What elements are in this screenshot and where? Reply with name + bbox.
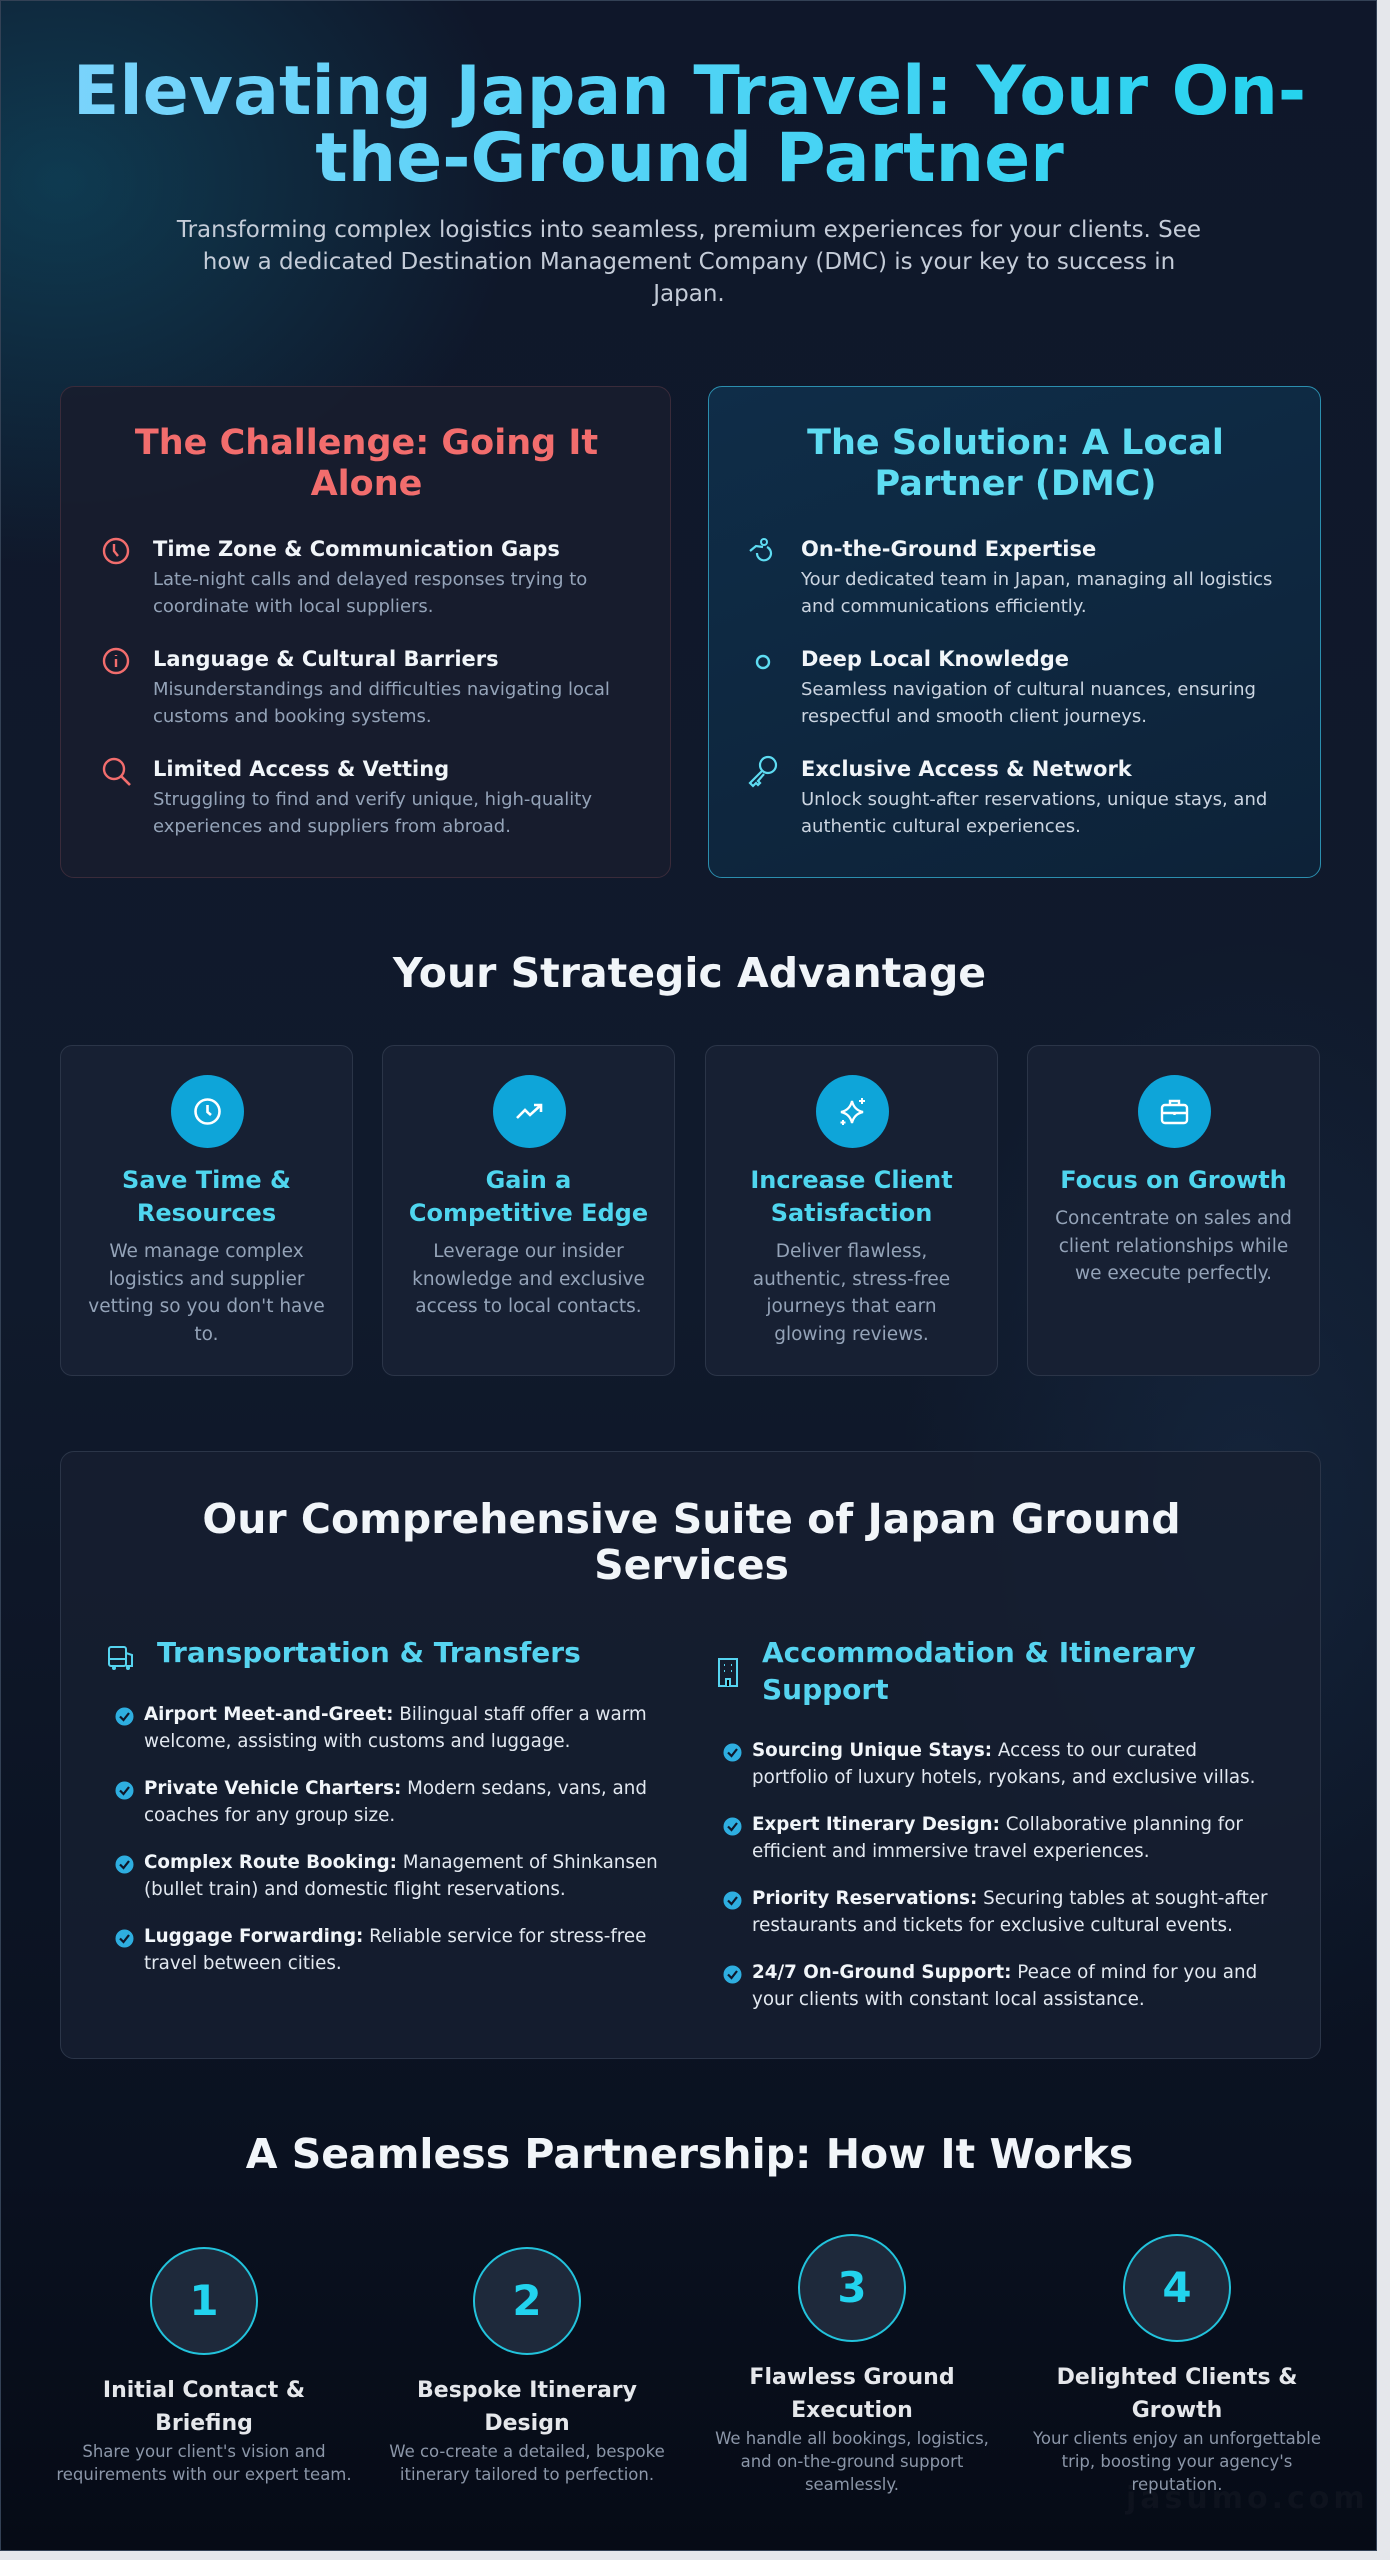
icon: clock: [171, 1075, 244, 1148]
column: transportation: Transportation & Transfers: [157, 1636, 581, 1669]
column: transportation: [108, 1636, 658, 1974]
title: [73, 52, 1306, 198]
card: save time: We manage complex logistics and supplier vetting so you don't have to.: [88, 1241, 325, 1344]
step 3: Flawless Ground: [749, 2365, 955, 2390]
challenge heading: [135, 423, 598, 504]
card: save time: [60, 1045, 353, 1376]
step 3: We handle all bookings, logistics, and on-the-ground support seamlessly.: [715, 2429, 989, 2494]
bullet: Sourcing Unique Stays: Access to our curated portfolio of luxury hotels, ryokans, and exclusive villas.: [752, 1740, 1255, 1788]
card: competitive edge: Leverage our insider knowledge and exclusive access to local contacts.: [412, 1241, 645, 1317]
column: accommodation: Accommodation & Itinerary: [762, 1636, 1196, 1669]
card: satisfaction: Deliver flawless, authentic, stress-free journeys that earn glowing reviews.: [753, 1241, 950, 1344]
item: time zone: [102, 537, 587, 617]
column: accommodation: Support: [762, 1673, 889, 1706]
step 3: 3: [837, 2263, 867, 2312]
challenge heading: Alone: [311, 464, 422, 504]
column: accommodation: [718, 1636, 1268, 2010]
step 4: Growth: [1132, 2398, 1222, 2423]
card: save time: Resources: [137, 1199, 276, 1227]
card: save time: Save Time &: [122, 1166, 291, 1194]
bullet: Airport Meet-and-Greet: Bilingual staff offer a warm welcome, assisting with customs and luggage.: [144, 1704, 647, 1752]
bullet: Luggage Forwarding: Reliable service for stress-free travel between cities.: [144, 1926, 646, 1974]
step 2: Bespoke Itinerary: [417, 2378, 637, 2403]
solution heading: Partner (DMC): [874, 464, 1156, 504]
card: satisfaction: Satisfaction: [771, 1199, 932, 1227]
panel: challenge: Language & Cultural Barriers: [153, 647, 499, 671]
card: satisfaction: [705, 1045, 998, 1376]
bullet: Priority Reservations: Securing tables at sought-after restaurants and tickets for exclusive cultural events.: [752, 1888, 1268, 1936]
icon: hand: [749, 538, 772, 562]
icon: trend: [493, 1075, 566, 1148]
icon: search: [102, 758, 131, 786]
title: the-Ground Partner: [315, 119, 1064, 198]
panel: solution: Seamless navigation of cultural nuances, ensuring respectful and smooth client journeys.: [801, 679, 1256, 727]
item: access: [102, 757, 592, 837]
solution heading: The Solution: A Local: [807, 423, 1224, 463]
panel: services: [60, 1451, 1321, 2059]
panel: challenge: [60, 386, 671, 878]
step 4: [1033, 2234, 1321, 2494]
panel: solution: On-the-Ground Expertise: [801, 537, 1096, 561]
panel: challenge: Time Zone & Communication Gaps: [153, 537, 560, 561]
heading: how it works: A Seamless Partnership: How It Works: [246, 2130, 1133, 2178]
challenge heading: The Challenge: Going It: [135, 423, 598, 463]
icon: building: [718, 1658, 738, 1687]
step 1: Share your client's vision and requirements with our expert team.: [56, 2442, 352, 2484]
step 1: Briefing: [155, 2411, 253, 2436]
card: growth: Focus on Growth: [1060, 1166, 1287, 1194]
item: knowledge: [756, 647, 1256, 727]
step 3: Execution: [791, 2398, 913, 2423]
card: competitive edge: [382, 1045, 675, 1376]
icon: sparkles: [816, 1075, 889, 1148]
step 4: Delighted Clients &: [1057, 2365, 1297, 2390]
title: Elevating Japan Travel: Your On-: [73, 52, 1306, 131]
item: network: [748, 756, 1267, 837]
subtitle: Transforming complex logistics into seamless, premium experiences for your clients. See how a dedicated Destination Management Company (DMC) is your key to success in Japan.: [177, 217, 1201, 307]
step 2: Design: [484, 2411, 570, 2436]
step 2: 2: [512, 2276, 542, 2325]
heading: strategic advantage: Your Strategic Advantage: [393, 949, 986, 997]
card: competitive edge: Competitive Edge: [409, 1199, 648, 1227]
bullet: Expert Itinerary Design: Collaborative planning for efficient and immersive travel experiences.: [752, 1814, 1243, 1862]
card: competitive edge: Gain a: [486, 1166, 571, 1194]
bullet: Private Vehicle Charters: Modern sedans, vans, and coaches for any group size.: [144, 1778, 647, 1826]
item: language: [102, 647, 610, 727]
panel: challenge: Late-night calls and delayed responses trying to coordinate with local suppliers.: [153, 569, 587, 617]
step 4: 4: [1162, 2263, 1192, 2312]
icon: clock: [102, 538, 130, 564]
watermark: jasumo.com: [1126, 2481, 1369, 2516]
step 4: Your clients enjoy an unforgettable trip, boosting your agency's reputation.: [1033, 2429, 1321, 2494]
panel: solution: [708, 386, 1321, 878]
panel: challenge: Limited Access & Vetting: [153, 757, 449, 781]
step 2: [389, 2247, 665, 2484]
icon: briefcase: [1138, 1075, 1211, 1148]
step 2: We co-create a detailed, bespoke itinerary tailored to perfection.: [389, 2442, 665, 2484]
panel: solution: Unlock sought-after reservations, unique stays, and authentic cultural experiences.: [801, 789, 1267, 837]
solution heading: [807, 423, 1224, 504]
bullet: 24/7 On-Ground Support: Peace of mind for you and your clients with constant local assistance.: [752, 1962, 1257, 2010]
services heading: [202, 1495, 1181, 1589]
step 1: [56, 2247, 352, 2484]
panel: solution: Exclusive Access & Network: [801, 757, 1132, 781]
icon: info: [102, 648, 130, 674]
card: satisfaction: Increase Client: [750, 1166, 953, 1194]
icon: bus: [108, 1646, 133, 1670]
card: growth: [1027, 1045, 1320, 1376]
panel: challenge: Misunderstandings and difficulties navigating local customs and booking systems.: [153, 679, 610, 727]
panel: solution: Your dedicated team in Japan, managing all logistics and communications efficiently.: [801, 569, 1272, 617]
step 3: [715, 2234, 989, 2494]
icon: key: [748, 756, 778, 788]
step 1: 1: [189, 2276, 219, 2325]
services heading: Our Comprehensive Suite of Japan Ground: [202, 1495, 1181, 1543]
step 1: Initial Contact &: [103, 2378, 305, 2403]
services heading: Services: [594, 1541, 789, 1589]
bullet: Complex Route Booking: Management of Shinkansen (bullet train) and domestic flight reservations.: [144, 1852, 658, 1900]
icon: circle: [756, 654, 770, 670]
item: expertise: [749, 537, 1272, 617]
panel: challenge: Struggling to find and verify unique, high-quality experiences and suppliers from abroad.: [153, 789, 592, 837]
card: growth: Concentrate on sales and client relationships while we execute perfectly.: [1055, 1208, 1292, 1284]
panel: solution: Deep Local Knowledge: [801, 647, 1069, 671]
